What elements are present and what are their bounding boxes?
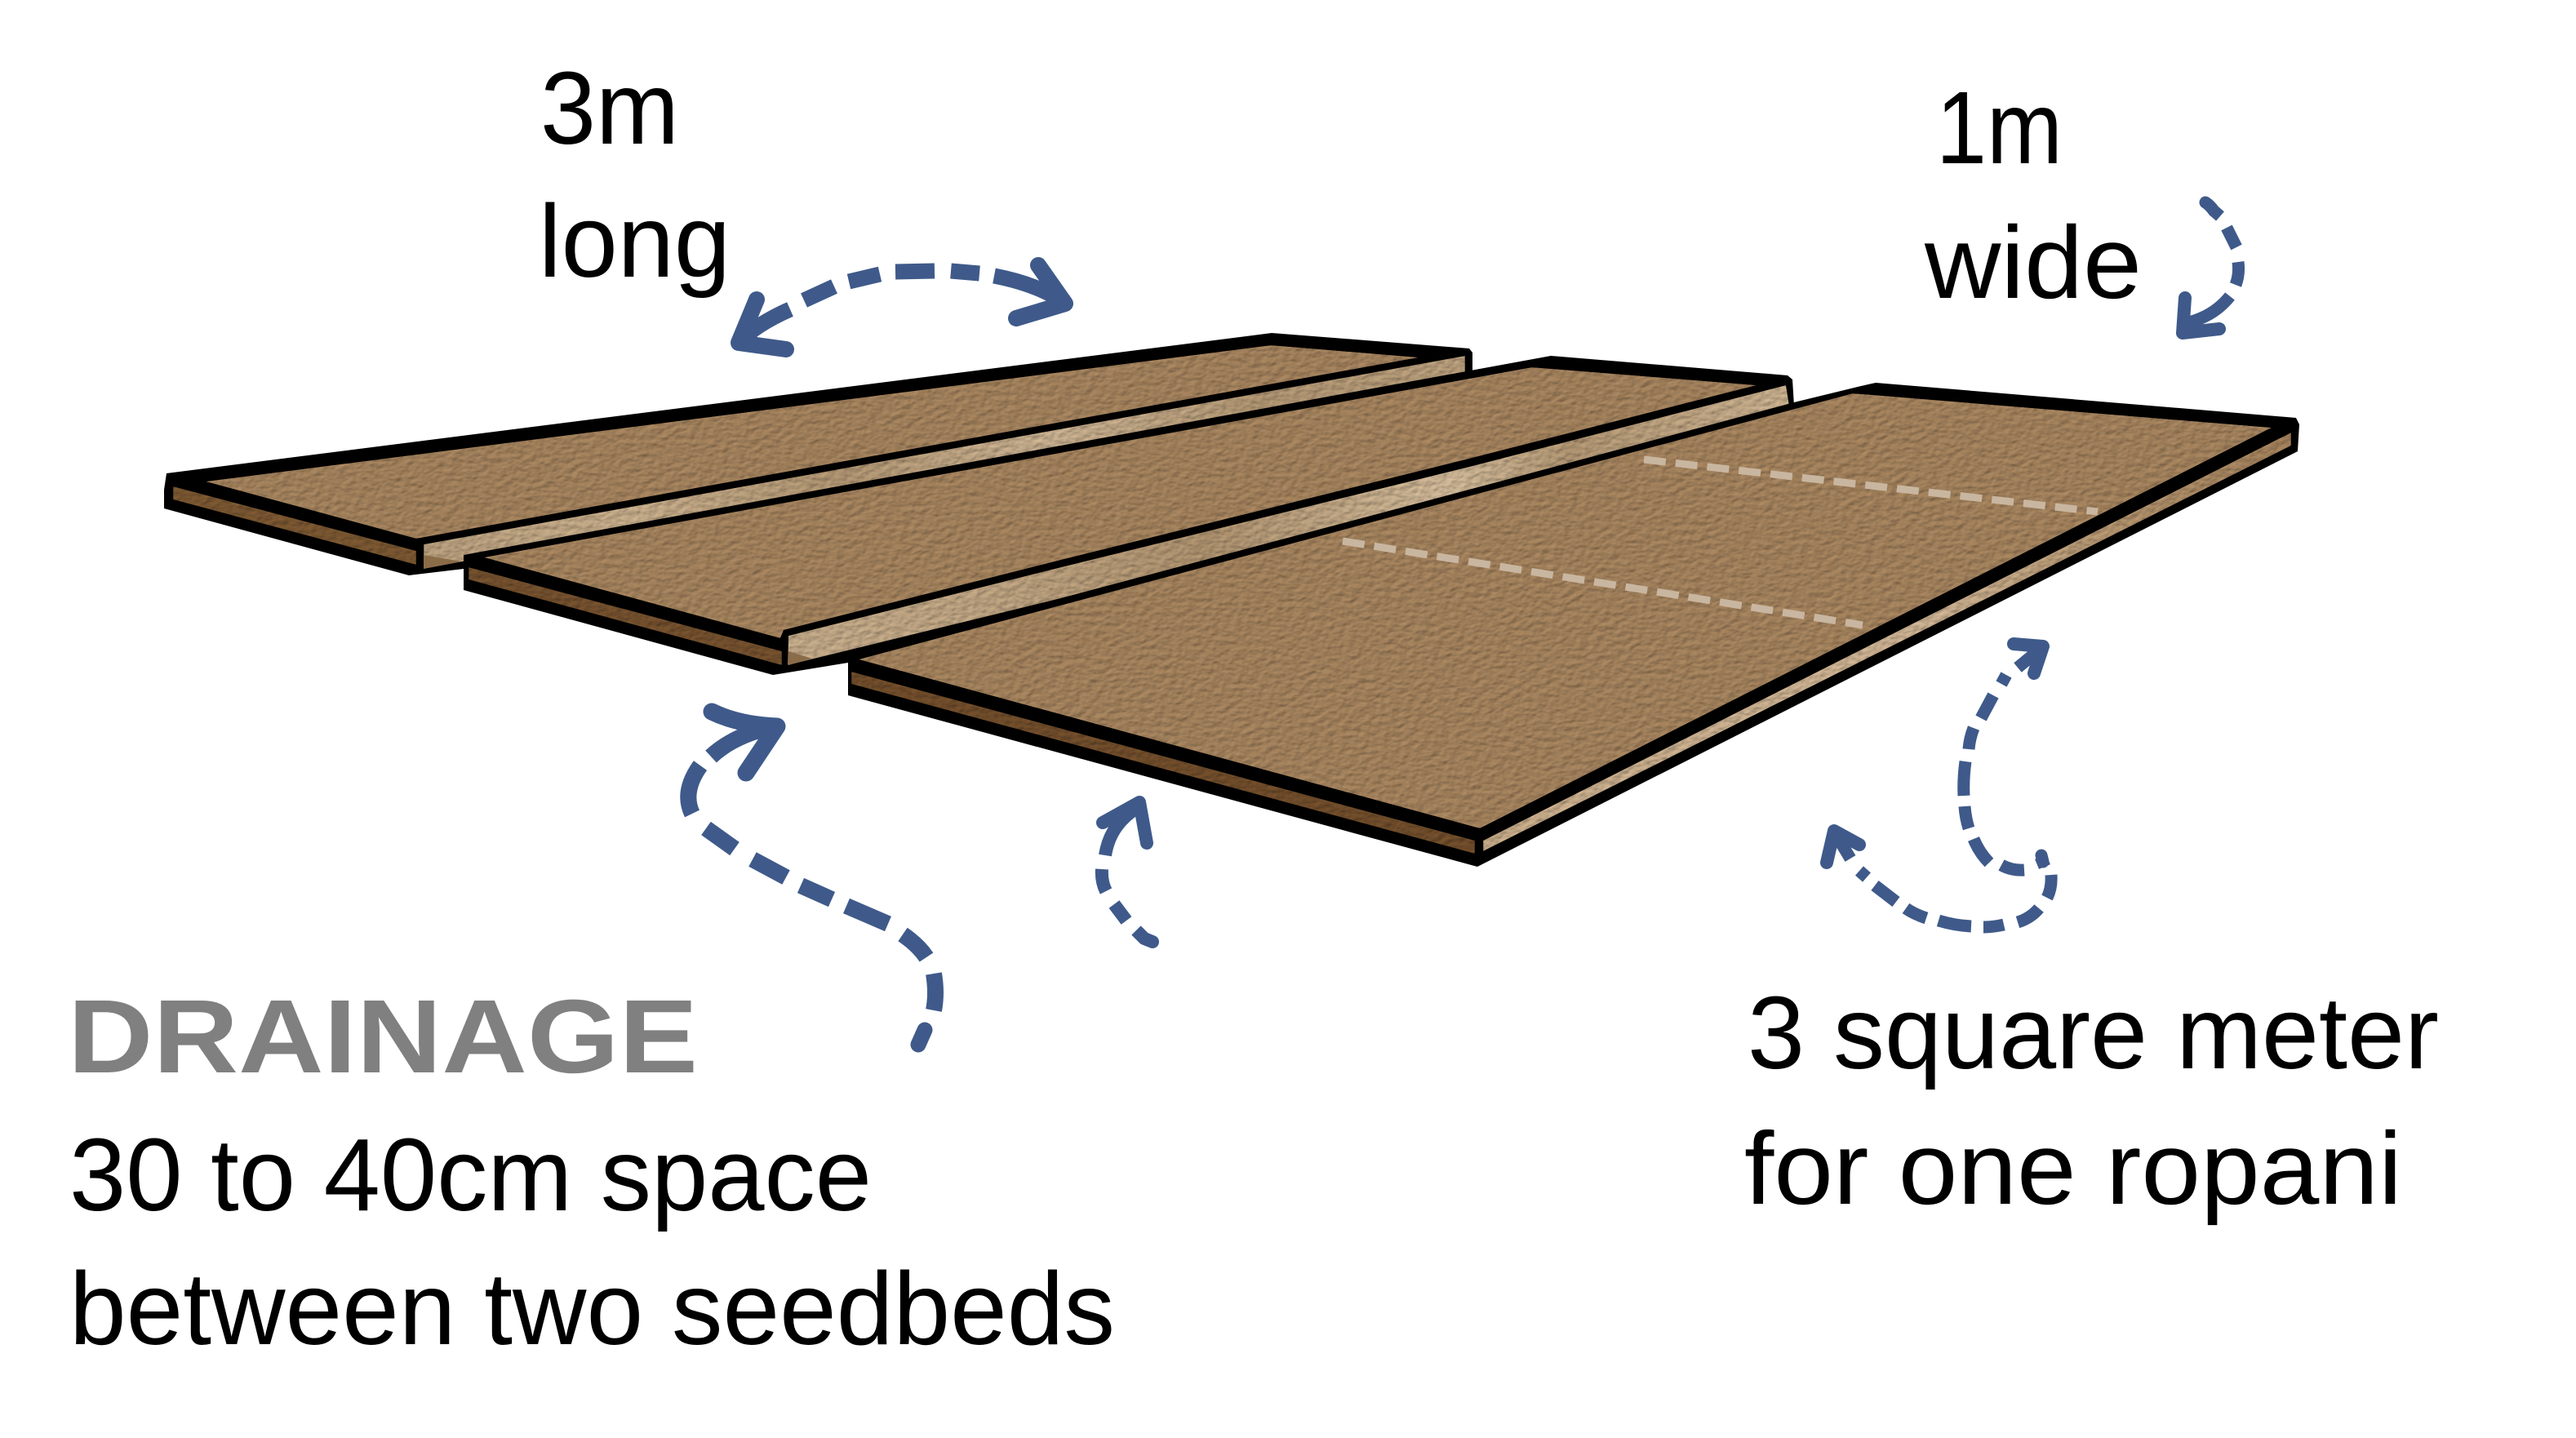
label: 3m long: 3m	[540, 51, 679, 166]
label: 1m wide: wide	[1924, 205, 2142, 320]
label: area per ropani: for one ropani	[1744, 1111, 2402, 1226]
seedbed 1 (left)	[164, 333, 1472, 575]
label: drainage spacing text: between two seedbeds	[69, 1251, 1115, 1366]
label: 3m long: long	[539, 184, 731, 299]
seedbed 2 (middle)	[464, 356, 1794, 675]
label: area per ropani: 3 square meter	[1748, 975, 2439, 1090]
label: 3m long	[539, 51, 731, 299]
label: drainage spacing text	[69, 1117, 1115, 1366]
dashed division line 1	[1644, 459, 2098, 512]
label: 1m wide	[1924, 70, 2142, 320]
arrow: drainage long dashed curve	[688, 712, 935, 1045]
arrow: 3m long double arrow	[739, 265, 1065, 349]
label: 1m wide: 1m	[1936, 70, 2063, 185]
label: area per ropani	[1744, 975, 2439, 1226]
label: drainage spacing text: 30 to 40cm space	[69, 1117, 872, 1232]
arrow: area curve up-right	[1964, 644, 2043, 870]
label: drainage heading: DRAINAGE	[68, 979, 698, 1095]
seedbed 3 (right, divided)	[848, 383, 2299, 867]
arrow: 1m wide	[2183, 202, 2239, 333]
arrow: drainage short dashed curve	[1102, 802, 1153, 942]
dashed division line 2	[1343, 541, 1863, 625]
arrow: area curve up-left	[1827, 831, 2051, 927]
